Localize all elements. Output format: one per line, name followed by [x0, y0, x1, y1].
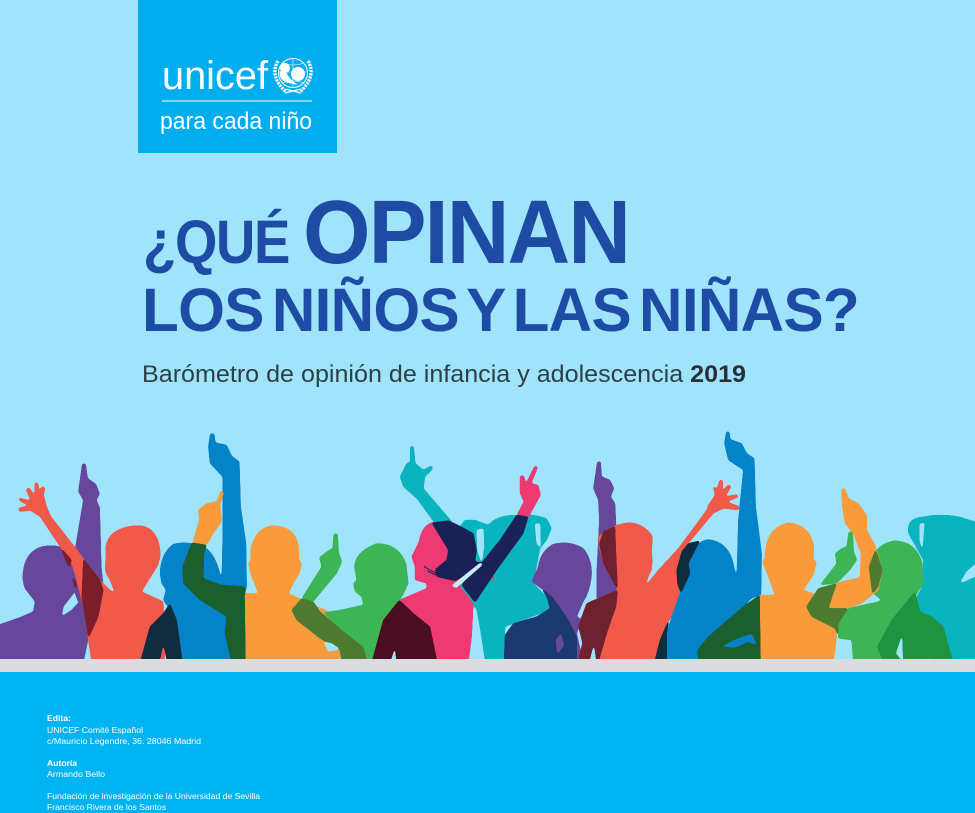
blue slit in dark green [722, 634, 757, 647]
pink sliver [470, 533, 495, 580]
icon: unicef emblem [275, 58, 311, 93]
red child with raised hand [18, 483, 165, 663]
credits text [47, 713, 260, 812]
credits text: UNICEF Comité Español [47, 725, 143, 735]
title line 1 small: ¿QUÉ [143, 208, 289, 276]
right group of children [625, 432, 975, 663]
green hand [820, 532, 857, 585]
credits text: Fundación de investigación de la Universidad de Sevilla [47, 791, 260, 801]
red child right [577, 523, 673, 663]
purple child [0, 546, 89, 663]
red child body and raised hand [625, 480, 740, 663]
teal girl [460, 515, 552, 663]
dark overlap: red arm on purple arm [82, 558, 103, 638]
dark navy arm [140, 603, 183, 663]
logo wordmark: unicef [162, 54, 269, 98]
darker green arm [877, 592, 953, 663]
credits text: Armando Bello [47, 769, 105, 779]
title line 2: LOS NIÑOS Y LAS NIÑAS? [142, 276, 859, 344]
blue child [160, 433, 247, 663]
dark hair sliver [677, 541, 700, 593]
children silhouettes [0, 432, 975, 663]
credits text: c/Mauricio Legendre, 36. 28046 Madrid [47, 736, 201, 746]
dark overlap: red arm on purple head [60, 547, 77, 592]
orange raised arm [828, 488, 882, 608]
light gaps in teal hair [468, 523, 541, 663]
subtitle: Barómetro de opinión de infancia y adolescencia 2019 [142, 361, 746, 388]
title line 1 large: OPINAN [303, 183, 629, 283]
dark sliver lower [654, 617, 670, 663]
maroon overlap on body [577, 590, 618, 663]
orange child [760, 523, 837, 663]
pink hand [517, 466, 541, 517]
title [142, 183, 859, 344]
green child [838, 541, 923, 663]
left group of children [0, 433, 340, 663]
orange hand [193, 491, 224, 545]
olive overlap: head [869, 549, 882, 594]
light gap by orange body [323, 642, 340, 652]
hair strands [424, 566, 457, 581]
teal arm and hand [400, 446, 453, 523]
blue child right [667, 432, 762, 663]
pink girl [399, 522, 477, 663]
teal girl right [908, 515, 975, 663]
navy blue child [504, 587, 577, 663]
credits text: Edita: [47, 713, 71, 723]
credits text: Autoría [47, 758, 77, 768]
logo tagline: para cada niño [160, 108, 312, 135]
dark green arm overlap [183, 543, 246, 663]
light gaps in teal girl [920, 523, 975, 583]
green raised hand and forearm [302, 533, 342, 602]
maroon arm [372, 600, 437, 663]
grey ledge [0, 659, 975, 672]
centre group of children [292, 446, 673, 663]
olive overlap: elbow [806, 583, 848, 637]
green child [323, 543, 408, 663]
credits text: Francisco Rivera de los Santos [47, 802, 166, 812]
purple arm [70, 463, 104, 637]
footer band [0, 672, 975, 813]
orange child [245, 526, 340, 663]
maroon overlap on hair [599, 526, 618, 590]
light sliver on navy [452, 563, 483, 588]
purple slit [556, 633, 564, 654]
navy overlap: arm and hair [432, 515, 528, 603]
olive forearm overlap [292, 598, 368, 663]
purple arm and child right [532, 462, 618, 663]
unicef logo panel [138, 0, 337, 153]
dark green overlap [698, 595, 761, 663]
